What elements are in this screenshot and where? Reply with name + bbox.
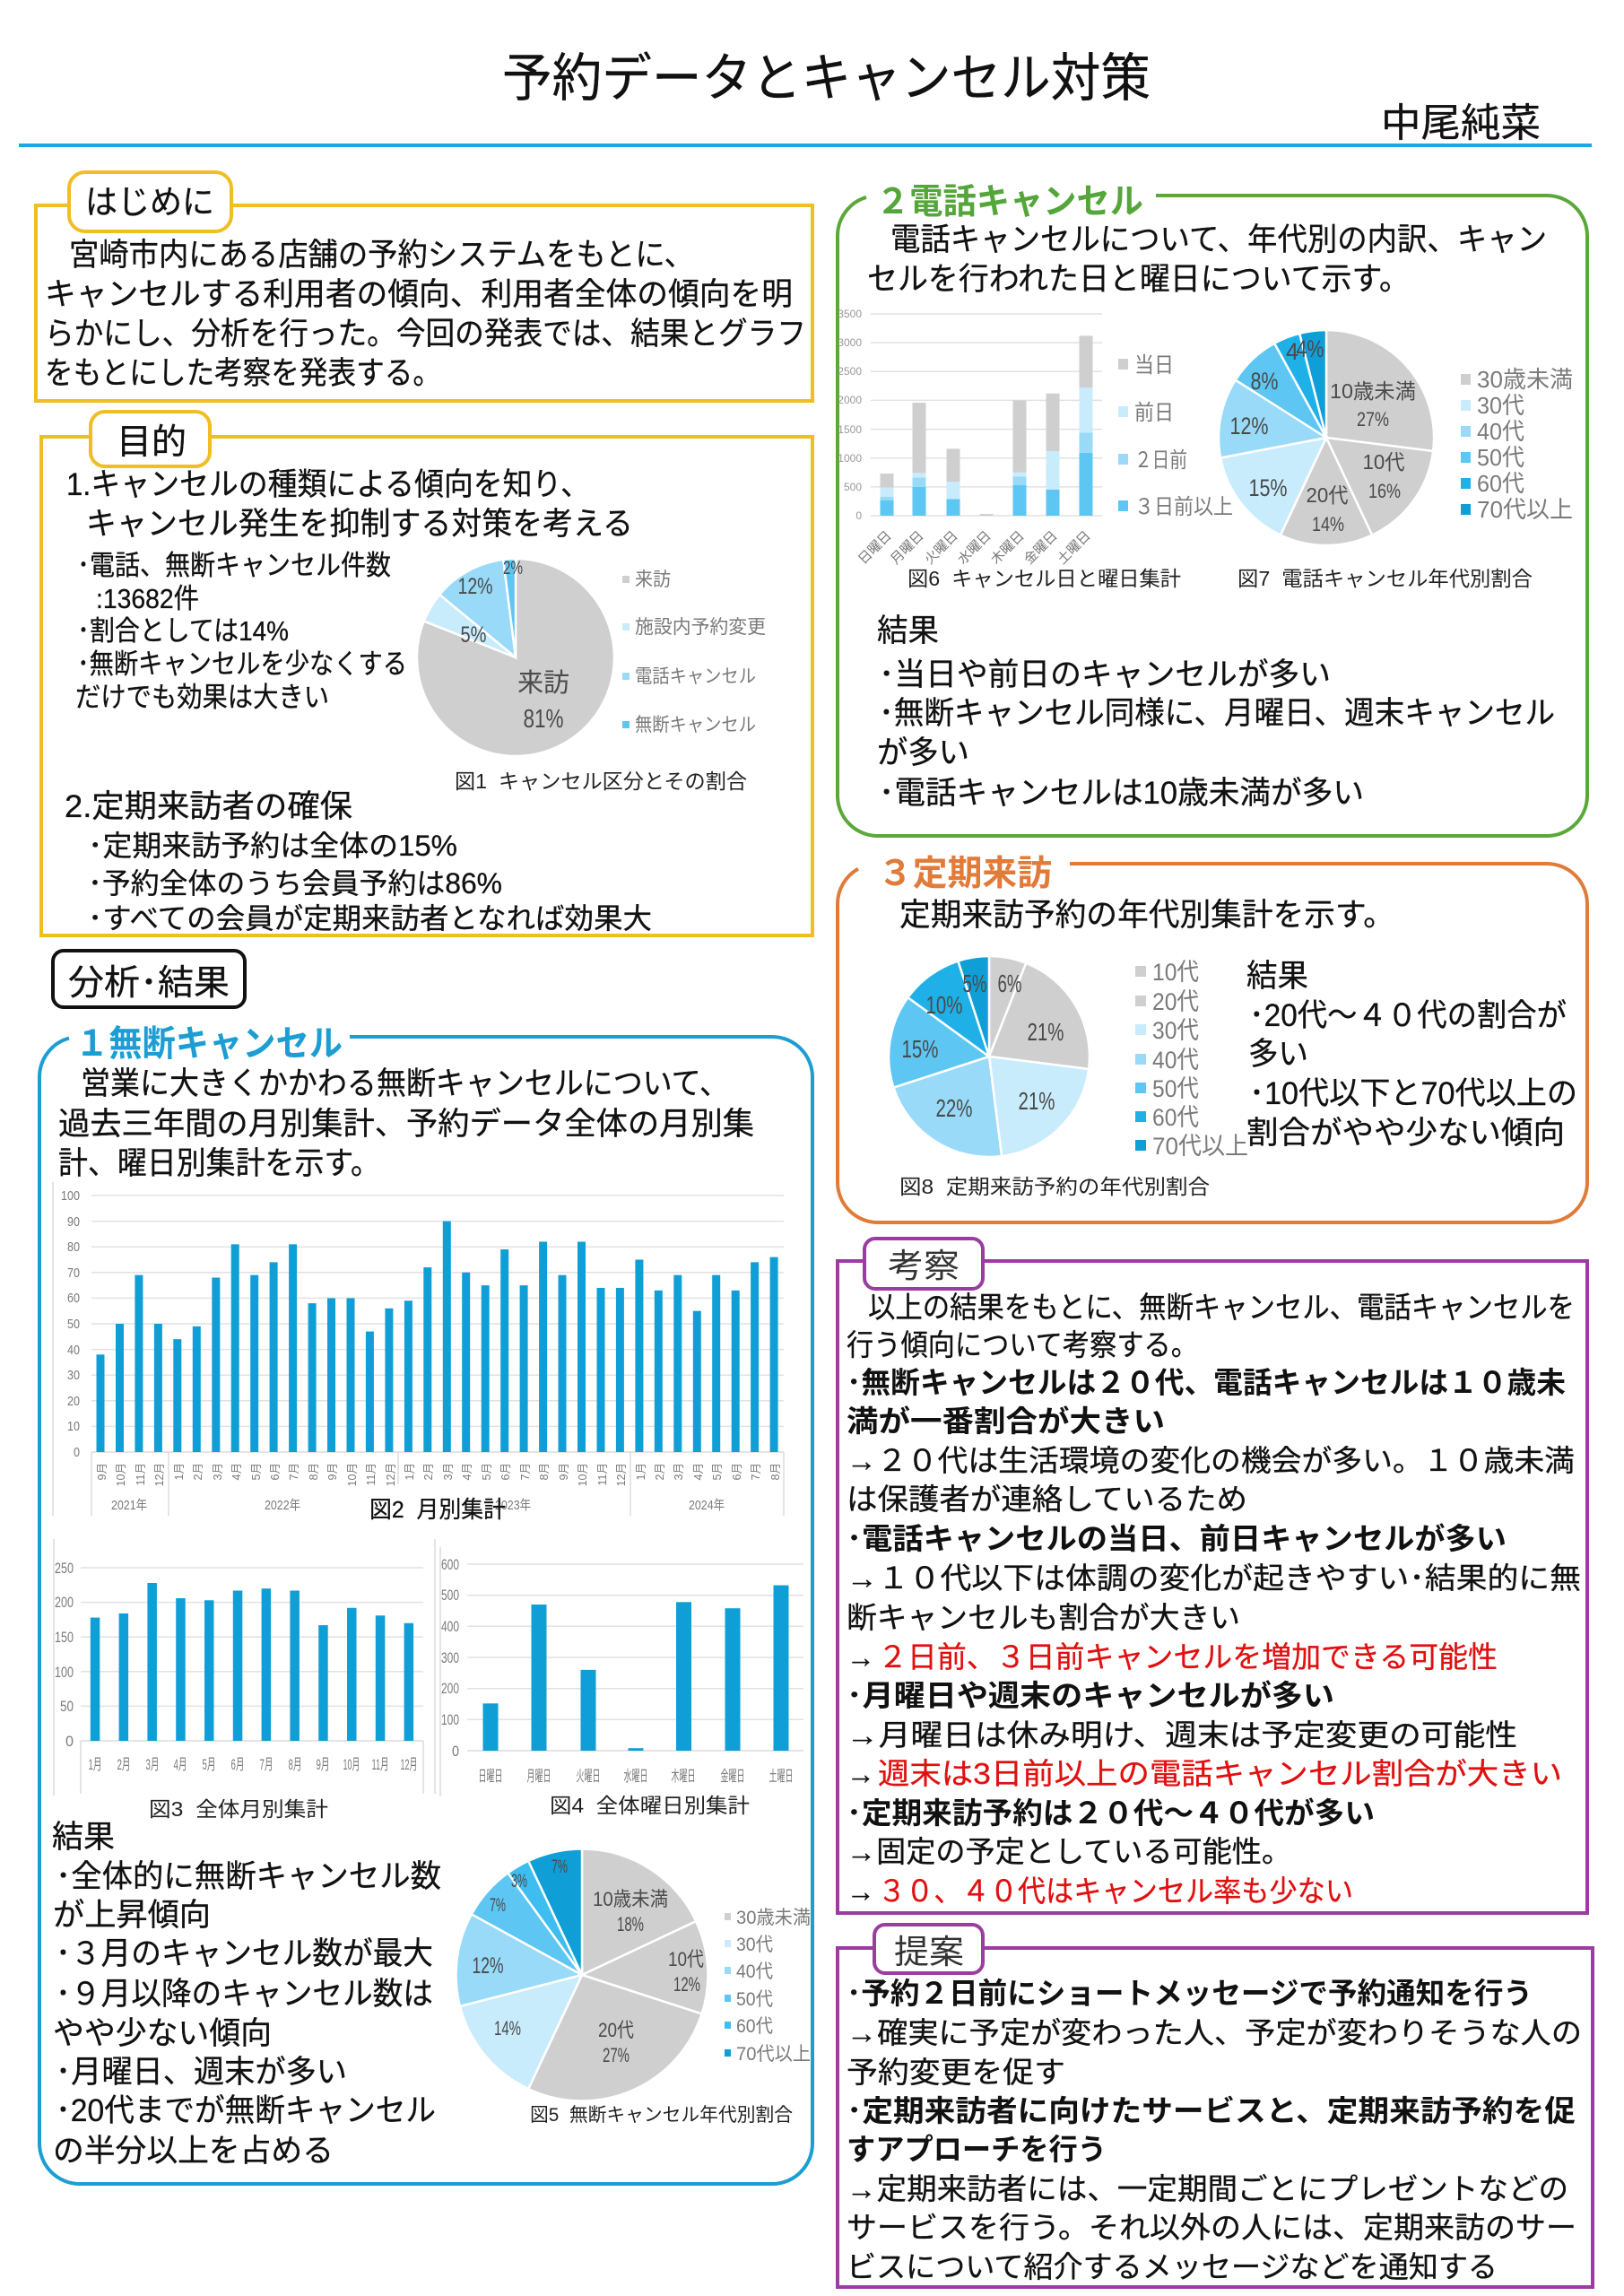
text: proposal body: ･予約２日前にショートメッセージで予約通知を行う — [847, 1977, 1533, 2010]
chart: overall weekday bars — [435, 1539, 803, 1796]
text: purpose 1 bullets: だけでも効果は大きい — [75, 682, 329, 713]
chart: overall monthly bars: 150 — [55, 1629, 74, 1646]
chart: phone cancel age pie: 16% — [1368, 480, 1401, 502]
chart: overall monthly bars: 250 — [55, 1560, 74, 1577]
chart: monthly no-show bars: 10月 — [346, 1463, 359, 1486]
caption: figure 5: 図5 無断キャンセル年代別割合 — [530, 2105, 793, 2126]
chart: phone cancel stacked bars: 3000 — [838, 336, 862, 349]
chart: phone cancel age pie: 12% — [1230, 413, 1268, 439]
caption: figure 4: 図4 全体曜日別集計 — [550, 1794, 750, 1817]
chart: monthly no-show bars: 2023年 — [495, 1498, 531, 1513]
legend: cancel category: 無断キャンセル — [635, 715, 756, 735]
text: purpose 1 bullets — [75, 550, 407, 713]
text: purpose 1 bullets: ･無断キャンセルを少なくする — [77, 648, 407, 680]
text: purpose 2 — [65, 789, 652, 935]
chart: overall weekday bars: 500 — [441, 1587, 459, 1604]
tab: purpose heading — [91, 412, 210, 466]
chart: cancel category pie: 来訪 — [517, 668, 569, 698]
legend: no-show age — [725, 1908, 811, 2065]
text: no-show results — [52, 1820, 441, 2169]
text: proposal body: ビスについて紹介するメッセージなどを通知する — [847, 2250, 1498, 2283]
chart: overall monthly bars: 10月 — [343, 1756, 360, 1773]
text: regular visit results — [1246, 959, 1577, 1151]
text: no-show results: ･20代までが無断キャンセル — [56, 2093, 436, 2128]
chart: monthly no-show bars: 2022年 — [265, 1498, 300, 1513]
legend: cancel category: 電話キャンセル — [635, 666, 756, 687]
text: proposal body: →確実に予定が変わった人、予定が変わりそうな人の — [847, 2016, 1582, 2049]
text: proposal body: ･定期来訪者に向けたサービスと、定期来訪予約を促 — [847, 2094, 1576, 2127]
chart: monthly no-show bars: 1月 — [173, 1463, 186, 1480]
text: regular visit results: 割合がやや少ない傾向 — [1246, 1116, 1565, 1151]
author: 中尾純菜 — [1381, 101, 1541, 145]
caption: figure 3: 図3 全体月別集計 — [149, 1797, 328, 1821]
panel: no-show cancellations — [39, 1024, 812, 2184]
text: discussion body: ･月曜日や週末のキャンセルが多い — [847, 1679, 1334, 1712]
panel: discussion — [838, 1239, 1587, 1913]
chart: phone cancel stacked bars: 3500 — [838, 308, 862, 320]
chart: overall weekday bars: 300 — [441, 1649, 459, 1666]
chart: overall monthly bars: 50 — [60, 1698, 74, 1715]
text: no-show results: ･月曜日、週末が多い — [56, 2055, 347, 2090]
text: introduction body: 宮崎市内にある店舗の予約システムをもとに、 — [69, 238, 694, 273]
tab: introduction heading — [69, 172, 231, 231]
chart: regular visit age pie: 21% — [1028, 1018, 1064, 1046]
text: no-show results: ･全体的に無断キャンセル数 — [56, 1859, 441, 1894]
chart: no-show age pie — [456, 1849, 708, 2100]
chart: no-show age pie: 27% — [603, 2044, 630, 2066]
text: proposal body — [847, 1977, 1582, 2283]
chart: overall monthly bars — [54, 1539, 423, 1796]
legend: regular visit age: 60代 — [1152, 1104, 1199, 1131]
caption: figure 6: 図6 キャンセル日と曜日集計 — [908, 567, 1181, 590]
chart: overall monthly bars: 100 — [55, 1664, 74, 1681]
chart: monthly no-show bars: 7月 — [519, 1463, 532, 1480]
chart: phone cancel stacked bars: 500 — [844, 481, 862, 493]
chart: overall monthly bars: 8月 — [289, 1756, 301, 1773]
chart: monthly no-show bars: 3月 — [442, 1463, 455, 1480]
chart: phone cancel age pie: 4 — [1286, 338, 1298, 365]
text: purpose 1 bullets: :13682件 — [96, 583, 199, 614]
legend: cancel category — [622, 570, 766, 735]
chart: regular visit age pie: 10% — [925, 991, 963, 1019]
chart: monthly no-show bars: 5月 — [250, 1463, 263, 1480]
chart: overall weekday bars: 200 — [441, 1680, 459, 1697]
chart: regular visit age pie: 21% — [1019, 1087, 1055, 1115]
chart: monthly no-show bars: 20 — [67, 1394, 80, 1409]
legend: regular visit age: 70代以上 — [1152, 1133, 1248, 1160]
heading: analysis and results — [53, 951, 245, 1007]
legend: phone cancel age — [1461, 366, 1573, 523]
chart: monthly no-show bars: 9月 — [96, 1463, 109, 1480]
chart: overall weekday bars: 0 — [452, 1743, 459, 1760]
text: no-show results: が上昇傾向 — [53, 1898, 211, 1933]
chart: monthly no-show bars: 11月 — [365, 1463, 378, 1485]
heading: no-show cancellations: １無断キャンセル — [75, 1024, 343, 1064]
text: no-show intro: 計、曜日別集計を示す。 — [58, 1146, 380, 1181]
chart: phone cancel age pie — [1219, 330, 1434, 545]
chart: no-show age pie: 10歳未満 — [593, 1888, 668, 1910]
tab: purpose heading: 目的 — [117, 423, 187, 462]
text: discussion body: 行う傾向について考察する。 — [847, 1328, 1198, 1361]
legend: regular visit age: 50代 — [1152, 1075, 1199, 1102]
text: discussion body: ･定期来訪予約は２０代～４０代が多い — [847, 1796, 1375, 1830]
chart: overall monthly bars: 11月 — [371, 1756, 389, 1773]
legend: regular visit age: 20代 — [1152, 988, 1199, 1015]
legend: phone cancel age: 60代 — [1477, 470, 1524, 497]
text: purpose 1 bullets: ･電話、無断キャンセル件数 — [77, 550, 391, 581]
chart: phone cancel age pie: 27% — [1357, 408, 1389, 430]
chart: monthly no-show bars: 10月 — [115, 1463, 127, 1486]
text: discussion body: ３０、４０代はキャンセル率も少ない — [878, 1874, 1353, 1908]
tab: discussion heading: 考察 — [888, 1248, 960, 1284]
legend: no-show age: 40代 — [736, 1961, 773, 1982]
legend: regular visit age: 30代 — [1152, 1017, 1199, 1044]
chart: phone cancel stacked bars: 2500 — [838, 365, 862, 378]
chart: monthly no-show bars: 3月 — [673, 1463, 685, 1480]
text: introduction body: キャンセルする利用者の傾向、利用者全体の傾向を明 — [45, 277, 793, 312]
chart: monthly no-show bars: 70 — [67, 1265, 80, 1281]
chart: monthly no-show bars: 4月 — [461, 1463, 473, 1480]
heading: analysis and results: 分析･結果 — [68, 964, 230, 1003]
chart: cancel category pie: 12% — [457, 574, 493, 599]
text: introduction body: をもとにした考察を発表する。 — [45, 356, 441, 391]
chart: overall weekday bars: 400 — [441, 1618, 459, 1635]
tab: proposal heading — [874, 1925, 983, 1973]
chart: no-show age pie: 12% — [472, 1953, 504, 1979]
chart: overall monthly bars: 200 — [55, 1594, 74, 1611]
text: introduction body — [45, 238, 806, 391]
chart: overall weekday bars: 火曜日 — [576, 1768, 601, 1785]
text: discussion body: →１０代以下は体調の変化が起きやすい･結果的に無 — [847, 1561, 1581, 1595]
text: purpose 1 — [66, 467, 633, 542]
chart: cancel category pie: 2% — [503, 558, 523, 578]
chart: phone cancel age pie: 20代 — [1306, 483, 1349, 507]
chart: phone cancel age pie: 4% — [1297, 335, 1324, 362]
chart: regular visit age pie: 5% — [963, 970, 986, 997]
chart: monthly no-show bars: 8月 — [538, 1463, 551, 1480]
heading: phone cancellations: ２電話キャンセル — [876, 183, 1143, 222]
chart: monthly no-show bars: 1月 — [404, 1463, 416, 1480]
text: regular visit results: ･20代～４０代の割合が — [1249, 998, 1567, 1033]
chart: no-show age pie: 20代 — [598, 2019, 634, 2041]
chart: overall weekday bars: 金曜日 — [721, 1768, 744, 1785]
text: discussion body: →月曜日は休み明け、週末は予定変更の可能性 — [847, 1718, 1517, 1752]
legend: no-show age: 50代 — [736, 1989, 773, 2010]
text: phone results: が多い — [877, 735, 969, 770]
legend: phone cancel age: 30代 — [1477, 392, 1524, 419]
chart: no-show age pie: 7% — [490, 1895, 506, 1916]
chart: monthly no-show bars: 5月 — [481, 1463, 493, 1480]
chart: no-show age pie: 18% — [617, 1913, 644, 1935]
chart: monthly no-show bars: 6月 — [499, 1463, 512, 1480]
chart: regular visit age pie: 22% — [936, 1094, 972, 1122]
chart: regular visit age pie — [889, 956, 1090, 1157]
chart: regular visit age pie: 15% — [902, 1035, 938, 1063]
chart: monthly no-show bars: 0 — [74, 1445, 80, 1460]
chart: monthly no-show bars: 8月 — [308, 1463, 320, 1480]
text: no-show results: ･９月以降のキャンセル数は — [56, 1977, 433, 2012]
text: phone results: ･当日や前日のキャンセルが多い — [879, 657, 1331, 692]
legend: days before: ３日前以上 — [1134, 495, 1233, 519]
chart: no-show age pie: 7% — [551, 1857, 568, 1877]
text: discussion body: 週末は3日前以上の電話キャンセル割合が大きい — [878, 1757, 1562, 1790]
legend: days before — [1118, 353, 1233, 519]
chart: monthly no-show bars: 2月 — [422, 1463, 435, 1480]
title rule — [19, 144, 1592, 147]
chart: monthly no-show bars: 11月 — [596, 1463, 609, 1485]
chart: overall monthly bars: 0 — [65, 1733, 74, 1750]
chart: monthly no-show bars: 100 — [61, 1188, 80, 1204]
caption: figure 8: 図8 定期来訪予約の年代別割合 — [899, 1175, 1210, 1198]
chart: overall monthly bars: 5月 — [203, 1756, 215, 1773]
chart: phone cancel stacked bars: 月曜日 — [888, 528, 927, 568]
text: discussion body: →２０代は生活環境の変化の機会が多い。１０歳未満 — [847, 1444, 1575, 1477]
chart: overall weekday bars: 600 — [441, 1556, 459, 1573]
text: purpose 2: ･予約全体のうち会員予約は86% — [88, 867, 502, 900]
text: discussion body: 以上の結果をもとに、無断キャンセル、電話キャンセルを — [868, 1291, 1575, 1324]
chart: overall weekday bars: 水曜日 — [624, 1768, 647, 1785]
text: no-show intro: 過去三年間の月別集計、予約データ全体の月別集 — [58, 1107, 754, 1142]
legend: regular visit age — [1135, 959, 1248, 1160]
legend: phone cancel age: 40代 — [1477, 418, 1524, 445]
text: discussion body: は保護者が連絡しているため — [847, 1483, 1247, 1516]
chart: monthly no-show bars: 80 — [67, 1239, 80, 1255]
chart: overall monthly bars: 12月 — [400, 1756, 418, 1773]
chart: phone cancel stacked bars: 金曜日 — [1021, 528, 1061, 568]
chart: no-show age pie: 3% — [511, 1871, 527, 1892]
chart: cancel category pie — [417, 558, 614, 756]
caption: figure 1: 図1 キャンセル区分とその割合 — [455, 770, 747, 793]
text: discussion body: ･無断キャンセルは２０代、電話キャンセルは１０歳未 — [847, 1366, 1566, 1399]
chart: cancel category pie: 5% — [461, 622, 486, 648]
chart: phone cancel age pie: 10代 — [1363, 450, 1404, 474]
chart: monthly no-show bars: 30 — [67, 1368, 80, 1383]
chart: monthly no-show bars: 7月 — [288, 1463, 300, 1480]
legend: days before: 前日 — [1134, 401, 1174, 425]
text: proposal body: 予約変更を促す — [847, 2056, 1065, 2089]
text: discussion body: ･電話キャンセルの当日、前日キャンセルが多い — [847, 1522, 1507, 1555]
chart: monthly no-show bars: 3月 — [212, 1463, 224, 1480]
chart: monthly no-show bars: 12月 — [385, 1463, 397, 1486]
chart: no-show age pie: 12% — [673, 1973, 700, 1996]
chart: phone cancel age pie: 8% — [1250, 368, 1279, 395]
legend: no-show age: 60代 — [736, 2016, 773, 2037]
title: 予約データとキャンセル対策 — [502, 49, 1151, 108]
text: no-show intro: 営業に大きくかかわる無断キャンセルについて、 — [81, 1066, 729, 1101]
chart: monthly no-show bars: 4月 — [692, 1463, 705, 1480]
chart: monthly no-show bars: 40 — [67, 1343, 80, 1358]
chart: phone cancel stacked bars: 1500 — [838, 423, 862, 436]
text: phone intro: 電話キャンセルについて、年代別の内訳、キャン — [890, 222, 1547, 257]
chart: phone cancel stacked bars: 土曜日 — [1055, 528, 1094, 568]
legend: no-show age: 30代 — [736, 1935, 773, 1955]
tab: discussion heading — [864, 1239, 983, 1289]
legend: regular visit age: 10代 — [1152, 959, 1199, 986]
text: discussion body: →固定の予定としている可能性。 — [847, 1835, 1291, 1868]
chart: monthly no-show bars: 6月 — [269, 1463, 282, 1480]
text: regular visit results: 多い — [1248, 1037, 1308, 1072]
chart: no-show age pie: 14% — [494, 2017, 521, 2039]
chart: overall monthly bars: 2月 — [117, 1756, 131, 1773]
chart: monthly no-show bars: 10 — [67, 1419, 80, 1434]
text: phone results: 結果 — [877, 613, 939, 648]
chart: phone cancel stacked bars: 木曜日 — [988, 528, 1028, 568]
text: purpose 1 bullets: ･割合としては14% — [77, 615, 289, 647]
chart: phone cancel stacked bars: 水曜日 — [955, 528, 994, 568]
chart: phone cancel stacked bars — [838, 308, 1102, 568]
chart: regular visit age pie: 6% — [997, 970, 1022, 997]
chart: phone cancel stacked bars: 0 — [855, 509, 862, 522]
text: discussion body: → — [847, 1757, 875, 1790]
text: discussion body: ２日前、３日前キャンセルを増加できる可能性 — [878, 1640, 1498, 1674]
chart: monthly no-show bars: 4月 — [230, 1463, 243, 1480]
chart: overall monthly bars: 3月 — [145, 1756, 160, 1773]
panel: proposal — [838, 1925, 1593, 2287]
chart: monthly no-show bars: 12月 — [153, 1463, 166, 1486]
text: no-show results: ･３月のキャンセル数が最大 — [56, 1936, 433, 1971]
chart: monthly no-show bars: 2024年 — [689, 1498, 725, 1513]
chart: monthly no-show bars: 6月 — [731, 1463, 743, 1480]
chart: monthly no-show bars: 1月 — [635, 1463, 647, 1480]
chart: monthly no-show bars: 11月 — [135, 1463, 147, 1485]
chart: overall weekday bars: 日曜日 — [479, 1768, 502, 1785]
legend: cancel category: 施設内予約変更 — [635, 617, 766, 638]
panel: introduction — [36, 172, 812, 401]
chart: monthly no-show bars: 9月 — [558, 1463, 570, 1480]
tab: proposal heading: 提案 — [894, 1934, 964, 1970]
chart: phone cancel stacked bars: 火曜日 — [922, 528, 961, 568]
chart: monthly no-show bars: 60 — [67, 1291, 80, 1306]
panel: phone cancellations — [838, 183, 1587, 836]
text: phone intro — [867, 222, 1547, 297]
legend: phone cancel age: 50代 — [1477, 444, 1524, 471]
legend: regular visit age: 40代 — [1152, 1047, 1199, 1074]
chart: overall monthly bars: 4月 — [174, 1756, 187, 1773]
text: discussion body: → — [847, 1640, 875, 1674]
legend: no-show age: 30歳未満 — [736, 1908, 811, 1928]
legend: days before: ２日前 — [1134, 448, 1187, 473]
text: proposal body: サービスを行う。それ以外の人には、定期来訪のサー — [847, 2211, 1576, 2244]
chart: monthly no-show bars: 90 — [67, 1214, 80, 1230]
caption: figure 2: 図2 月別集計 — [369, 1496, 506, 1523]
chart: no-show age pie: 10代 — [668, 1948, 704, 1970]
chart: monthly no-show bars: 10月 — [577, 1463, 589, 1486]
text: phone results — [877, 613, 1555, 811]
text: purpose 2: ･すべての会員が定期来訪者となれば効果大 — [88, 902, 652, 935]
chart: overall weekday bars: 100 — [441, 1711, 459, 1728]
text: phone results: ･無断キャンセル同様に、月曜日、週末キャンセル — [879, 696, 1555, 731]
chart: phone cancel stacked bars: 2000 — [838, 394, 862, 406]
text: no-show intro — [58, 1066, 754, 1181]
chart: monthly no-show bars: 2月 — [654, 1463, 666, 1480]
text: phone results: ･電話キャンセルは10歳未満が多い — [879, 776, 1364, 811]
chart: phone cancel age pie: 15% — [1248, 474, 1288, 501]
text: discussion body: 断キャンセルも割合が大きい — [847, 1601, 1240, 1634]
chart: overall monthly bars: 6月 — [231, 1756, 244, 1773]
text: regular visit results: ･10代以下と70代以上の — [1249, 1076, 1577, 1111]
chart: phone cancel stacked bars: 1000 — [838, 452, 862, 465]
panel: purpose — [41, 412, 812, 935]
legend: days before: 当日 — [1134, 353, 1174, 378]
text: discussion body: 満が一番割合が大きい — [847, 1405, 1165, 1438]
tab: introduction heading: はじめに — [85, 184, 214, 221]
chart: overall monthly bars: 1月 — [88, 1756, 102, 1773]
chart: overall weekday bars: 木曜日 — [671, 1768, 696, 1785]
text: no-show results: の半分以上を占める — [53, 2134, 334, 2169]
panel: regular visits — [838, 855, 1587, 1222]
legend: phone cancel age: 30歳未満 — [1477, 366, 1573, 393]
chart: monthly no-show bars: 50 — [67, 1317, 80, 1332]
chart: monthly no-show bars: 2021年 — [111, 1498, 147, 1513]
chart: cancel category pie: 81% — [524, 705, 563, 734]
text: proposal body: →定期来訪者には、一定期間ごとにプレゼントなどの — [847, 2172, 1568, 2205]
chart: overall weekday bars: 月曜日 — [527, 1768, 551, 1785]
text: phone intro: セルを行われた日と曜日について示す。 — [867, 262, 1410, 297]
text: no-show results: やや少ない傾向 — [53, 2016, 272, 2051]
text: discussion body: → — [847, 1874, 875, 1908]
text: proposal body: すアプローチを行う — [847, 2133, 1107, 2166]
text: regular visit results: 結果 — [1246, 959, 1308, 994]
legend: cancel category: 来訪 — [635, 570, 671, 590]
text: purpose 2: ･定期来訪予約は全体の15% — [88, 830, 457, 862]
chart: monthly no-show bars: 2月 — [192, 1463, 204, 1480]
text: no-show results: 結果 — [52, 1820, 115, 1855]
text: regular visits intro: 定期来訪予約の年代別集計を示す。 — [899, 898, 1394, 933]
chart: monthly no-show bars: 9月 — [326, 1463, 339, 1480]
text: discussion body — [847, 1291, 1581, 1908]
chart: overall monthly bars: 9月 — [316, 1756, 330, 1773]
legend: phone cancel age: 70代以上 — [1477, 496, 1573, 523]
text: purpose 2: 2.定期来訪者の確保 — [65, 789, 352, 824]
text: purpose 1: 1.キャンセルの種類による傾向を知り、 — [66, 467, 590, 502]
text: purpose 1: キャンセル発生を抑制する対策を考える — [86, 507, 633, 542]
legend: no-show age: 70代以上 — [736, 2044, 811, 2065]
chart: phone cancel age pie: 10歳未満 — [1330, 379, 1416, 403]
chart: monthly no-show bars: 5月 — [711, 1463, 724, 1480]
chart: phone cancel age pie: 14% — [1312, 513, 1344, 535]
chart: overall monthly bars: 7月 — [260, 1756, 273, 1773]
chart: phone cancel stacked bars: 日曜日 — [855, 528, 895, 568]
chart: monthly no-show bars: 12月 — [615, 1463, 628, 1486]
text: introduction body: らかにし、分析を行った。今回の発表では、結果とグラフ — [45, 317, 806, 352]
heading: regular visits: ３定期来訪 — [878, 855, 1052, 893]
chart: monthly no-show bars: 7月 — [750, 1463, 762, 1480]
chart: monthly no-show bars: 8月 — [769, 1463, 782, 1480]
chart: monthly no-show bars — [53, 1182, 784, 1516]
chart: overall weekday bars: 土曜日 — [769, 1768, 793, 1785]
caption: figure 7: 図7 電話キャンセル年代別割合 — [1238, 567, 1533, 590]
